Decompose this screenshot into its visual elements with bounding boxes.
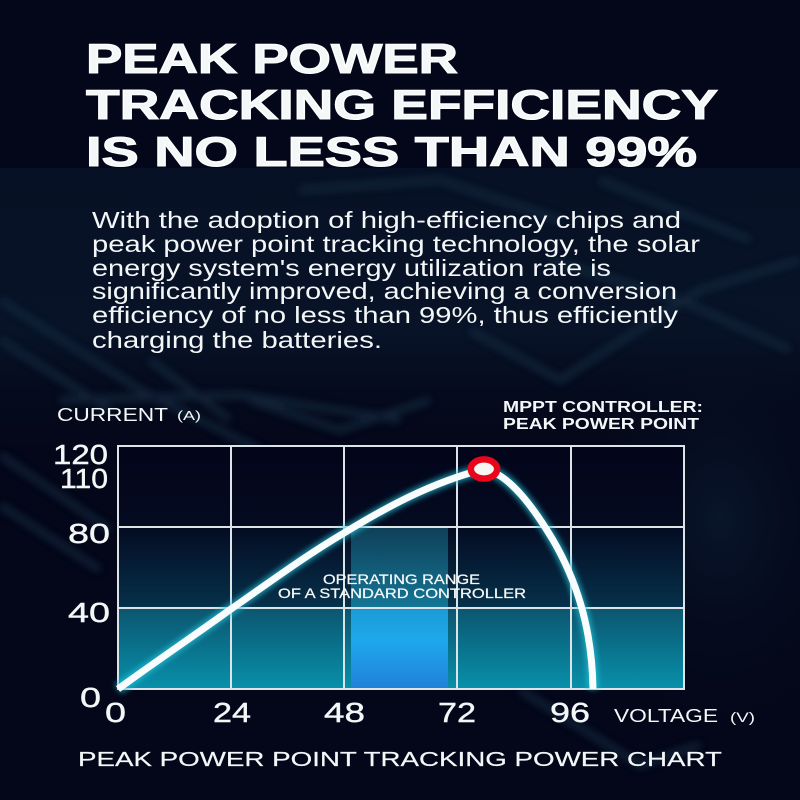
description text block: With the adoption of high-efficiency chips and [92, 207, 681, 233]
curve [118, 469, 593, 689]
chart caption: PEAK POWER POINT TRACKING POWER CHART [78, 748, 723, 771]
mppt callout label: MPPT CONTROLLER: [503, 399, 703, 416]
description text block: energy system's energy utilization rate is [92, 255, 611, 281]
x axis labels: 0 [105, 697, 126, 728]
x axis labels: 96 [550, 697, 590, 728]
x axis labels: 24 [213, 697, 251, 728]
description text block: significantly improved, achieving a conversion [92, 278, 677, 304]
y axis labels: 120 [53, 439, 108, 470]
plot background [118, 446, 684, 689]
description text block: charging the batteries. [92, 327, 382, 353]
description text block: peak power point tracking technology, the solar [92, 231, 700, 257]
grid [118, 446, 684, 689]
y axis title: current: (A) [177, 408, 201, 423]
mppt callout label [503, 399, 703, 433]
y axis title: current [57, 404, 201, 425]
y axis labels [53, 439, 110, 713]
title: TRACKING EFFICIENCY [86, 81, 718, 128]
title [86, 35, 718, 175]
y axis title: current: CURRENT [57, 404, 168, 425]
operating range band [351, 528, 448, 689]
title: PEAK POWER [86, 35, 458, 82]
x axis labels: 72 [438, 697, 476, 728]
y axis labels: 0 [80, 682, 101, 713]
x axis title: voltage: (V) [730, 709, 755, 725]
y axis labels: 110 [60, 463, 108, 494]
title: IS NO LESS THAN 99% [86, 128, 697, 175]
description text block: efficiency of no less than 99%, thus efficiently [92, 302, 678, 328]
y axis labels: 40 [68, 597, 110, 628]
operating range label: OPERATING RANGE [323, 571, 480, 587]
x axis labels [105, 697, 590, 728]
x axis title: voltage: VOLTAGE [614, 705, 718, 726]
y axis labels: 80 [68, 518, 110, 549]
operating range label: OF A STANDARD CONTROLLER [278, 585, 526, 601]
peak power point marker [471, 459, 497, 479]
chart: peak power curve [118, 446, 684, 689]
operating range label [278, 571, 526, 601]
x axis title: voltage [614, 705, 755, 726]
description text block [92, 207, 700, 353]
mppt callout label: PEAK POWER POINT [503, 416, 700, 433]
x axis labels: 48 [324, 697, 365, 728]
